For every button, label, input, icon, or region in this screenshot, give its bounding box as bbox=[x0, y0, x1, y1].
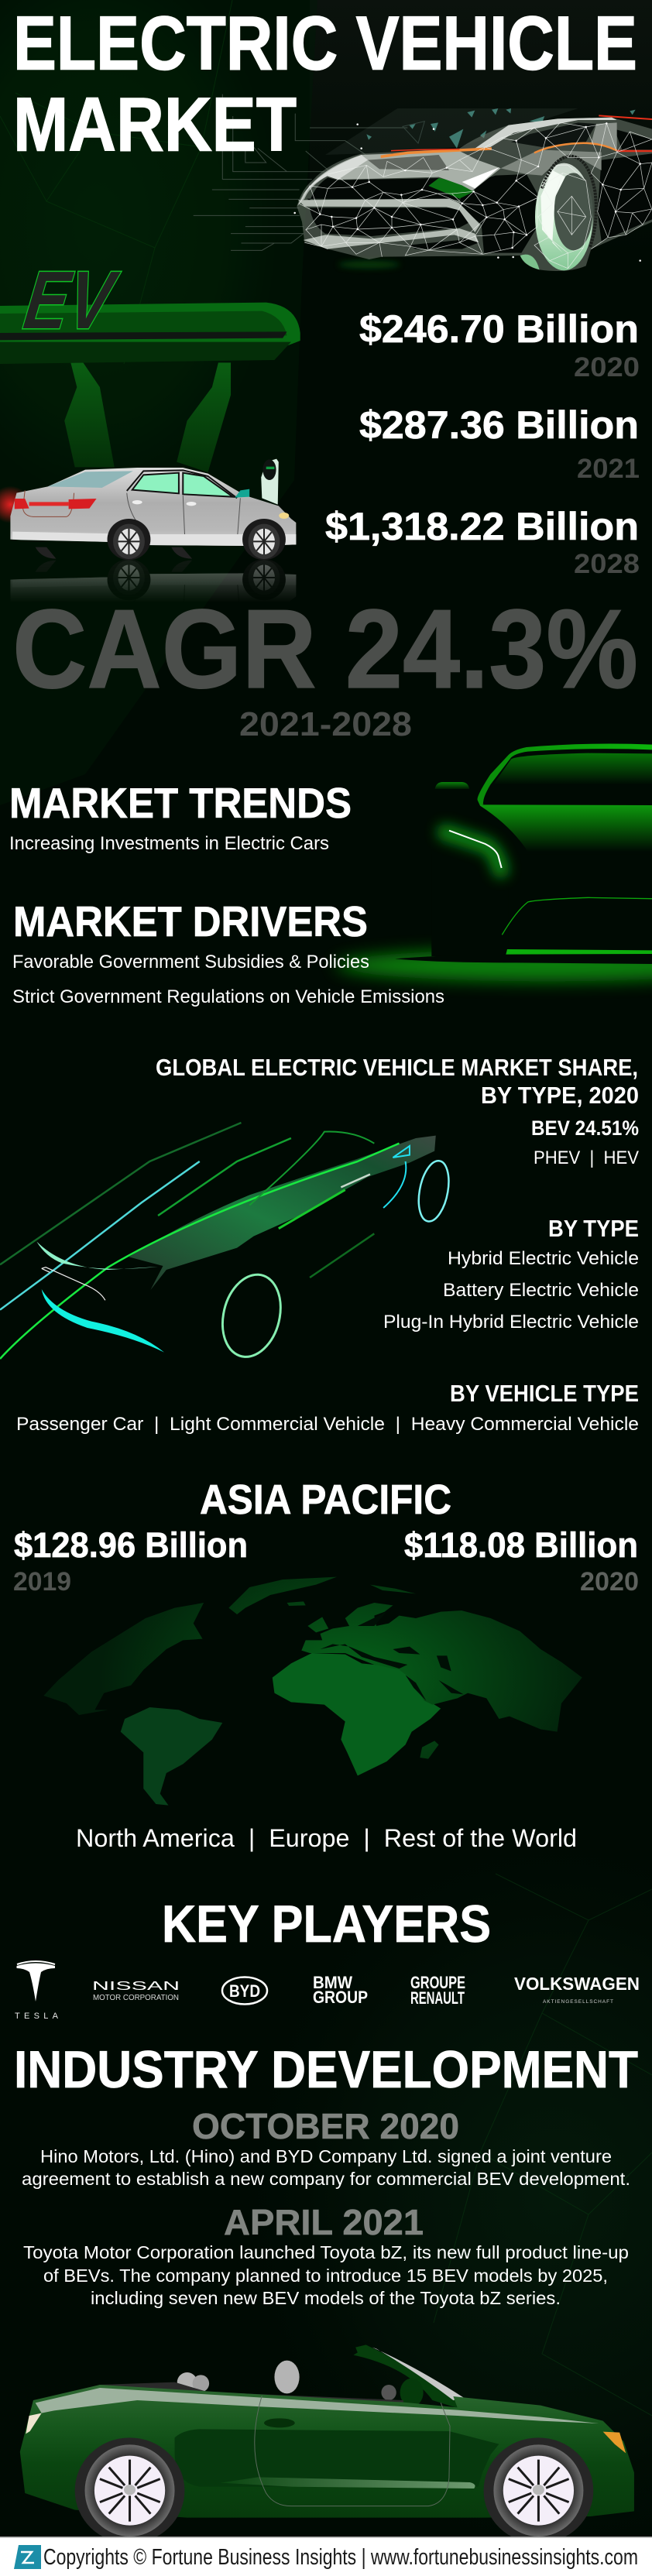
door lines bbox=[255, 2396, 450, 2506]
market trends item: Increasing Investments in Electric Cars bbox=[9, 833, 329, 854]
market trends heading: MARKET TRENDS bbox=[9, 779, 352, 827]
logo: Volkswagen bbox=[514, 1974, 640, 2005]
logo: Groupe Renault: GROUPE bbox=[410, 1973, 465, 1992]
car body bbox=[10, 468, 296, 560]
window glint bbox=[393, 1146, 410, 1158]
april 2021 description: Toyota Motor Corporation launched Toyota bZ, its new full product line-up bbox=[23, 2242, 629, 2262]
logo: Nissan bbox=[92, 1980, 180, 2002]
eurasia bbox=[301, 1603, 582, 1732]
BEV share: BEV 24.51% bbox=[531, 1116, 639, 1140]
front wheel bbox=[520, 156, 596, 270]
front arch bbox=[383, 1161, 406, 1208]
iceland bbox=[287, 1601, 306, 1606]
market drivers heading: MARKET DRIVERS bbox=[13, 897, 368, 945]
october 2020 date: OCTOBER 2020 bbox=[192, 2106, 459, 2146]
neon swoosh car bbox=[0, 1123, 453, 1359]
market size 2021 value: $287.36 Billion bbox=[359, 403, 639, 447]
asia pacific heading: ASIA PACIFIC bbox=[200, 1477, 451, 1523]
tail-light glow bbox=[0, 486, 30, 523]
front wheel ring bbox=[414, 1160, 453, 1223]
market share heading: BY TYPE, 2020 bbox=[481, 1082, 639, 1109]
market driver item two: Strict Government Regulations on Vehicle Emissions bbox=[12, 986, 444, 1007]
battery electric vehicle: Battery Electric Vehicle bbox=[443, 1280, 639, 1301]
green convertible bbox=[20, 2344, 634, 2543]
footer logo bbox=[14, 2545, 41, 2569]
charger pillars bbox=[64, 362, 231, 472]
logo: BMW Group: GROUP bbox=[313, 1988, 368, 2007]
windshield bbox=[483, 753, 652, 805]
asia pacific 2020 value: $118.08 Billion bbox=[404, 1525, 638, 1565]
hybrid electric vehicle: Hybrid Electric Vehicle bbox=[448, 1248, 639, 1269]
inland seas bbox=[320, 1612, 464, 1701]
circuit board lines bbox=[194, 94, 407, 250]
market size 2020 value: $246.70 Billion bbox=[359, 307, 639, 351]
logo: Nissan: MOTOR CORPORATION bbox=[93, 1994, 179, 2002]
logo: Tesla: TESLA bbox=[15, 2012, 59, 2021]
asia pacific 2019 value: $128.96 Billion bbox=[14, 1525, 248, 1565]
south america bbox=[121, 1707, 222, 1806]
asia pacific 2020 year: 2020 bbox=[580, 1567, 639, 1597]
roof panel bbox=[475, 118, 617, 149]
logo: BYD: BYD bbox=[229, 1981, 260, 2001]
arctic islands bbox=[370, 1585, 416, 1593]
charger canopy bbox=[0, 303, 300, 364]
rear wheel ring bbox=[217, 1273, 287, 1359]
speed lines bbox=[0, 1123, 400, 1359]
asia pacific 2019 year: 2019 bbox=[13, 1567, 71, 1597]
hood gradient bbox=[480, 804, 652, 852]
mesh nodes bbox=[295, 123, 640, 261]
ground shadow bbox=[395, 955, 652, 964]
africa bbox=[273, 1653, 441, 1775]
EV charging station illustration bbox=[0, 303, 300, 472]
silver sedan at charger bbox=[0, 458, 296, 598]
world map bbox=[43, 1577, 582, 1806]
EV badge: EV bbox=[19, 254, 124, 346]
plug-in hybrid electric vehicle: Plug-In Hybrid Electric Vehicle bbox=[383, 1312, 639, 1333]
body bbox=[20, 2385, 634, 2518]
footer bar bbox=[0, 2537, 652, 2576]
body silhouette bbox=[431, 849, 509, 956]
logo: Volkswagen: AKTIENGESELLSCHAFT bbox=[543, 1999, 613, 2005]
october 2020 description: Hino Motors, Ltd. (Hino) and BYD Company Ltd. signed a joint venture bbox=[40, 2146, 612, 2166]
seats bbox=[177, 2361, 424, 2406]
lower windshield line bbox=[502, 897, 652, 935]
other regions list: North America | Europe | Rest of the World bbox=[76, 1824, 577, 1852]
main title bbox=[13, 0, 637, 167]
side strip bbox=[221, 2477, 475, 2489]
britain bbox=[307, 1617, 328, 1632]
greenland bbox=[228, 1577, 337, 1614]
hood bright band bbox=[297, 151, 501, 206]
tail light bbox=[26, 2413, 42, 2434]
CAGR period: 2021-2028 bbox=[239, 705, 412, 743]
reflection bbox=[11, 560, 296, 598]
market driver item one: Favorable Government Subsidies & Policies bbox=[12, 952, 369, 972]
market size 2028 year: 2028 bbox=[574, 549, 640, 579]
madagascar bbox=[420, 1741, 439, 1759]
logo: BMW Group: BMW bbox=[313, 1973, 352, 1992]
april 2021 description: including seven new BEV models of the Toyota bZ series. bbox=[91, 2288, 561, 2308]
april 2021 date: APRIL 2021 bbox=[224, 2202, 424, 2242]
october 2020 description bbox=[22, 2146, 630, 2189]
front wheel bbox=[484, 2437, 593, 2543]
april 2021 description bbox=[23, 2242, 629, 2308]
interior deck bbox=[100, 2382, 403, 2403]
charger post bbox=[261, 459, 279, 505]
dark body mask bbox=[431, 854, 652, 956]
headlight glow bbox=[445, 832, 501, 870]
green reflection bbox=[428, 178, 475, 199]
car shoulder bbox=[129, 1136, 436, 1290]
logo: Groupe Renault: RENAULT bbox=[410, 1988, 465, 2008]
north america bbox=[43, 1603, 204, 1715]
mesh lines bbox=[300, 122, 652, 269]
market size 2021 year: 2021 bbox=[577, 454, 640, 484]
green sports car silhouette bbox=[335, 744, 652, 981]
logo: Nissan: NISSAN bbox=[92, 1980, 180, 1993]
side shadow panel bbox=[175, 2429, 499, 2487]
under-car green glow bbox=[338, 261, 400, 268]
logo: BMW Group bbox=[313, 1973, 368, 2007]
highlight band bbox=[36, 2388, 599, 2423]
windshield frame bbox=[353, 2344, 464, 2408]
hood accent streaks bbox=[381, 115, 652, 156]
main title: MARKET bbox=[13, 82, 297, 167]
rear wheel bbox=[75, 2437, 184, 2543]
side mirror bbox=[435, 782, 469, 789]
grille strip bbox=[506, 949, 652, 955]
roof outline bbox=[478, 744, 652, 806]
key players heading: KEY PLAYERS bbox=[162, 1895, 491, 1953]
low-poly car illustration bbox=[295, 108, 652, 271]
by type heading: BY TYPE bbox=[548, 1215, 639, 1242]
mirror and headlight bbox=[235, 489, 289, 519]
grille bars bbox=[298, 199, 480, 249]
vehicle type list: Passenger Car | Light Commercial Vehicle | Heavy Commercial Vehicle bbox=[16, 1414, 639, 1435]
logo: Tesla bbox=[15, 1961, 59, 2021]
rear light curves bbox=[36, 1241, 158, 1270]
floor glow bbox=[335, 949, 652, 981]
side panel bbox=[501, 149, 602, 176]
door handle bbox=[264, 2418, 295, 2427]
logo: BYD bbox=[222, 1977, 267, 2004]
body base bbox=[297, 118, 652, 271]
PHEV and HEV labels: PHEV | HEV bbox=[534, 1147, 640, 1168]
april 2021 description: of BEVs. The company planned to introduce 15 BEV models by 2025, bbox=[43, 2266, 608, 2286]
headlight bbox=[603, 2432, 626, 2453]
logo: Volkswagen: VOLKSWAGEN bbox=[514, 1974, 640, 1994]
key player logos bbox=[15, 1961, 640, 2021]
market size 2028 value: $1,318.22 Billion bbox=[325, 505, 639, 548]
market size 2020 year: 2020 bbox=[574, 352, 640, 382]
headlight stroke bbox=[449, 831, 502, 868]
logo: Groupe Renault bbox=[410, 1973, 465, 2008]
dark glass and grille zones bbox=[307, 122, 652, 253]
october 2020 description: agreement to establish a new company for commercial BEV development. bbox=[22, 2169, 630, 2189]
market share heading bbox=[156, 1054, 639, 1109]
light fragments bbox=[325, 108, 636, 155]
